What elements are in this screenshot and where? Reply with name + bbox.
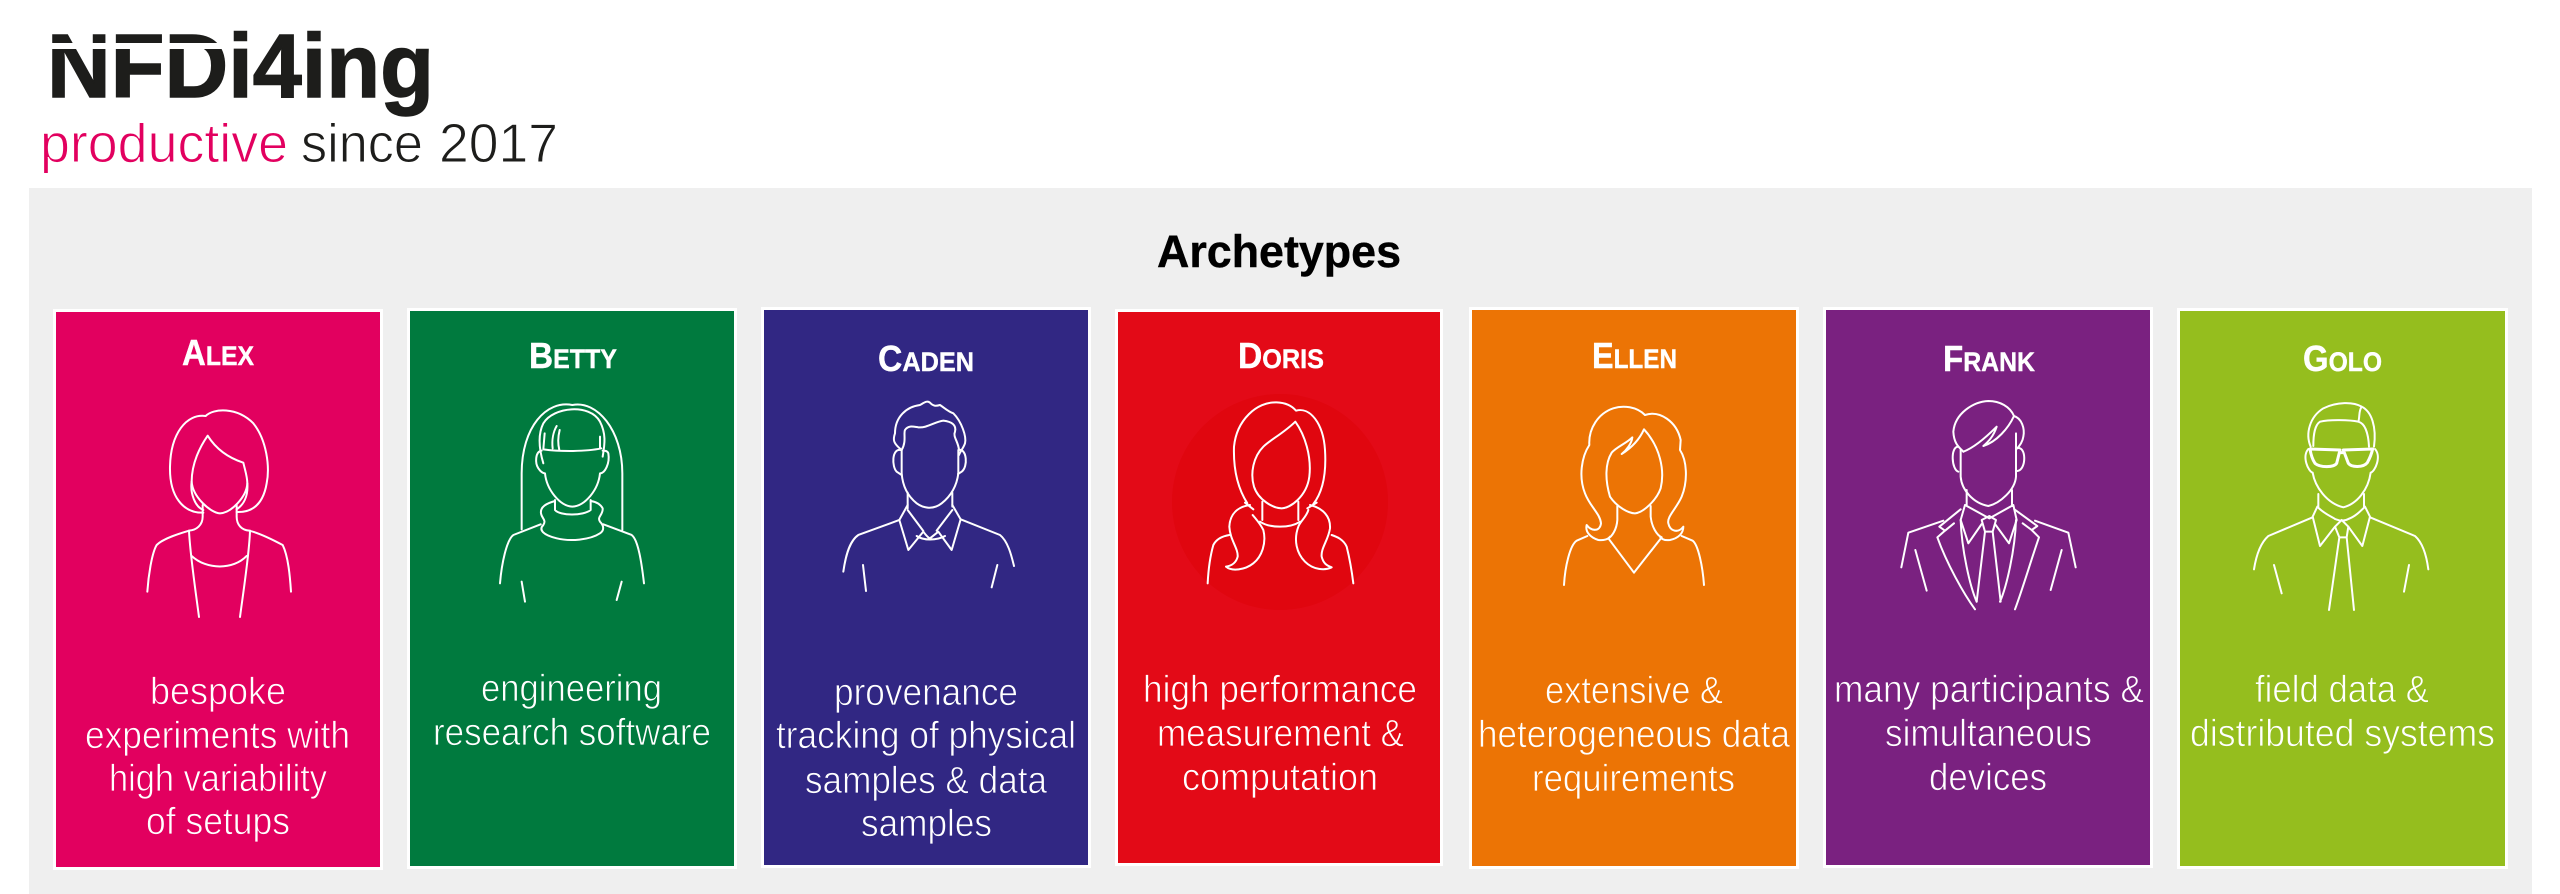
description: Doris: measurement & — [1157, 713, 1404, 755]
description: Frank: devices — [1929, 757, 2047, 799]
name: Frank: FRANK — [1943, 338, 2035, 379]
description: Alex: bespoke — [150, 671, 286, 713]
heading: Archetypes: Archetypes — [1157, 226, 1401, 277]
description: Alex: high variability — [109, 758, 327, 800]
icon: Betty portrait — [500, 404, 644, 602]
tagline: productive — [40, 112, 288, 174]
panel: Alex — [53, 309, 383, 870]
panel: Betty — [407, 308, 737, 869]
description: Ellen: heterogeneous data — [1478, 714, 1791, 756]
name: Betty: BETTY — [529, 335, 617, 376]
icon: Frank portrait — [1901, 401, 2076, 609]
description: Betty — [433, 668, 711, 754]
description: Caden — [776, 672, 1076, 845]
icon: Alex portrait — [147, 410, 291, 617]
description: Golo: field data & — [2255, 669, 2429, 711]
tagline — [40, 112, 558, 174]
description: Doris — [1143, 669, 1417, 799]
description: Ellen: requirements — [1532, 758, 1735, 800]
panel: Ellen — [1469, 307, 1799, 869]
icon background circle — [1172, 394, 1388, 610]
panel: Golo — [2177, 308, 2508, 869]
description: Caden: samples & data — [805, 760, 1048, 802]
description: Betty: research software — [433, 712, 711, 754]
description: Caden: samples — [861, 803, 992, 845]
tagline: 2017 — [439, 112, 558, 174]
icon: Caden portrait — [843, 402, 1014, 591]
icon: Golo portrait — [2254, 403, 2428, 610]
description: Golo: distributed systems — [2190, 713, 2495, 755]
description: Alex: of setups — [146, 801, 290, 843]
name: Golo: GOLO — [2303, 338, 2382, 379]
description: Doris: computation — [1182, 757, 1378, 799]
name: Alex: ALEX — [182, 332, 254, 373]
panel: Caden — [761, 307, 1091, 868]
tagline: since — [301, 112, 423, 174]
logo: NFDi4ing: NFDi4ing — [47, 17, 434, 117]
description: Ellen — [1478, 670, 1791, 800]
description: Caden: provenance — [834, 672, 1018, 714]
description: Alex: experiments with — [85, 715, 350, 757]
description: Ellen: extensive & — [1545, 670, 1723, 712]
panel: Doris — [1115, 309, 1443, 866]
description: Frank — [1834, 669, 2144, 799]
description: Betty: engineering — [481, 668, 662, 710]
description: Frank: many participants & — [1834, 669, 2144, 711]
description: Alex — [85, 671, 350, 843]
panel: Frank — [1823, 307, 2153, 868]
name: Ellen: ELLEN — [1592, 335, 1677, 376]
name: Caden: CADEN — [878, 338, 974, 379]
icon: Ellen portrait — [1564, 407, 1704, 585]
name: Doris: DORIS — [1238, 335, 1324, 376]
description: Doris: high performance — [1143, 669, 1417, 711]
panel: archetypes background — [29, 188, 2532, 894]
icon: Doris portrait — [1208, 402, 1353, 583]
description: Golo — [2190, 669, 2495, 755]
description: Caden: tracking of physical — [776, 715, 1076, 757]
description: Frank: simultaneous — [1885, 713, 2092, 755]
